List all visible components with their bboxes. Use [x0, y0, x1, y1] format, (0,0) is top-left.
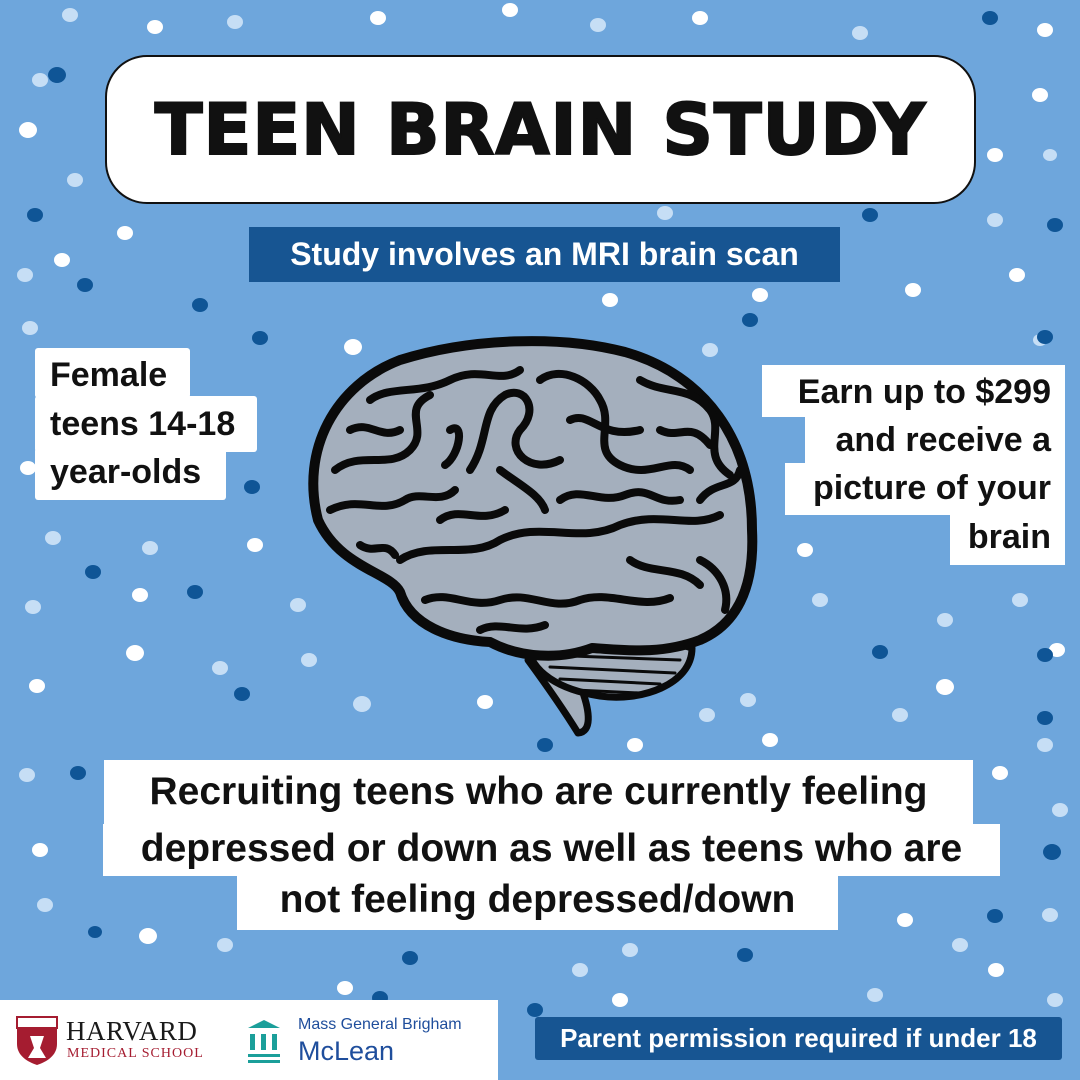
callout: eligibility: year-olds [50, 453, 201, 491]
callout: compensation [762, 365, 1065, 565]
callout: eligibility [35, 348, 257, 500]
subtitle: MRI: Study involves an MRI brain scan [290, 236, 799, 272]
logo: Harvard Medical School: MEDICAL SCHOOL [67, 1046, 204, 1061]
callout: recruiting: not feeling depressed/down [280, 878, 795, 921]
callout: recruiting: depressed or down as well as teens who are [141, 827, 962, 870]
callout: compensation: picture of your [813, 469, 1051, 507]
callout: compensation: Earn up to $299 [798, 373, 1051, 411]
subtitle: MRI [249, 227, 840, 282]
logo: Mass General Brigham McLean [248, 1016, 462, 1066]
footer note: parent permission [535, 1017, 1062, 1060]
title [105, 55, 976, 204]
logo: Harvard Medical School [16, 1016, 204, 1065]
callout: compensation: and receive a [836, 421, 1051, 459]
logo: Mass General Brigham McLean: Mass General Brigham [298, 1016, 462, 1033]
footer logos [0, 1000, 498, 1080]
title: TEEN BRAIN STUDY [155, 88, 926, 170]
callout: recruiting [103, 760, 1000, 930]
logo: Harvard Medical School: HARVARD [66, 1016, 197, 1046]
callout: eligibility: teens 14-18 [50, 405, 235, 443]
callout: compensation: brain [968, 518, 1051, 556]
callout: eligibility: Female [50, 356, 167, 394]
logo: Mass General Brigham McLean: McLean [298, 1036, 394, 1066]
footer note: parent permission: Parent permission required if under 18 [560, 1023, 1037, 1053]
callout: recruiting: Recruiting teens who are currently feeling [149, 770, 928, 813]
